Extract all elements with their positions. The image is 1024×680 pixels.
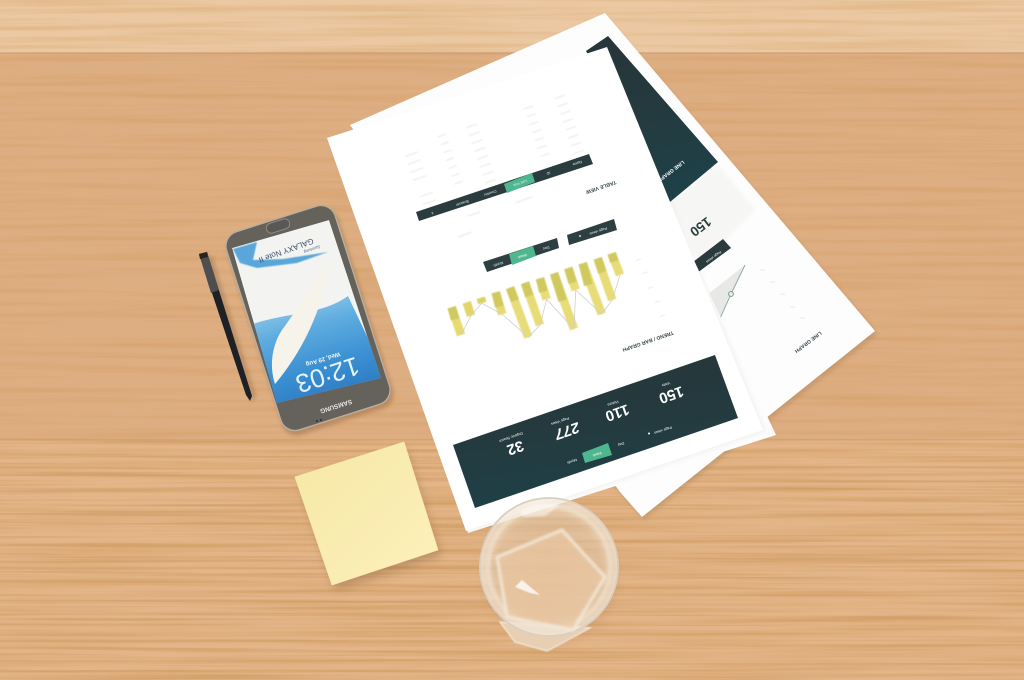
stat: visits: 150 [657,382,686,407]
brand: samsung small: Samsung [303,244,321,255]
home button dots [316,419,322,422]
day week month toggle [483,238,559,272]
page views filter button: Page views [589,226,608,236]
stat: visits: Visits [661,381,671,387]
stat: organic search: Organic Search [499,431,523,443]
toggle label: day: Day [542,245,550,251]
trend and bar chart [452,253,665,337]
faint axis labels on back sheet [760,270,805,318]
feather [272,310,318,384]
page views button on back sheet: Page views [705,250,722,264]
column label: last visit: Last Visit [513,179,528,187]
heading: table view: TABLE VIEW [585,179,617,195]
water glass [480,498,618,651]
faint axis labels [636,259,665,316]
stat: visitors: Visitors [607,399,619,407]
faint table rows [405,95,584,237]
stat: visitors: 110 [603,401,631,424]
column label: number: # [431,211,434,215]
bullet [648,432,650,434]
toggle label: month: Month [567,458,577,465]
bars [452,253,620,337]
heading: line graph: LINE GRAPH [793,330,822,354]
date: Wed, 29 Aug [305,350,341,367]
toggle label: month: Month [493,260,504,267]
week toggle button: Week [592,451,602,457]
stat: 150 on back sheet: 150 [687,214,714,240]
table header bar [416,154,593,221]
brand: galaxy note: GALAXY Note II [257,236,315,264]
heading: trend and bar graph: TREND / BAR GRAPH [621,329,674,352]
week toggle button [582,443,612,463]
dark summary band on back sheet [586,36,718,202]
stat: organic search [499,431,526,458]
page views label: Page views [653,425,672,435]
rim highlight [520,504,560,517]
column label: country: Country [484,189,497,197]
column label: name: Name [572,159,583,166]
bottom stats band [453,355,738,508]
toggle label: week: Week [517,253,527,259]
phone screen [232,220,381,403]
heading: line graph on dark band: LINE GRAPH [656,159,685,183]
brand: samsung: SAMSUNG [319,397,353,414]
page views filter button [567,219,617,245]
blue lower wallpaper [254,296,381,403]
inner pentagon [497,530,605,630]
sticky note [295,442,441,590]
toggle label: day: Day [617,441,625,447]
stylus pen [199,252,256,402]
column label: browser: Browser [455,199,469,207]
clock: 12:03 [292,351,363,399]
blue swoosh [233,242,328,268]
line chart fragment [707,265,745,325]
trend line [461,275,620,337]
glass highlight [515,580,540,595]
page views button on back sheet [693,239,731,273]
front sheet: analytics report [327,47,765,532]
stat: page views: Page Views [550,416,570,426]
faint grey patch behind stat [670,165,755,265]
back sheet: line graph report [350,13,878,520]
middle sheet [330,60,776,533]
smartphone [222,202,397,439]
column label: id: ID [546,170,551,176]
stat: organic search: 32 [505,437,526,458]
home earpiece [265,218,291,234]
stat: page views: 277 [552,418,583,443]
